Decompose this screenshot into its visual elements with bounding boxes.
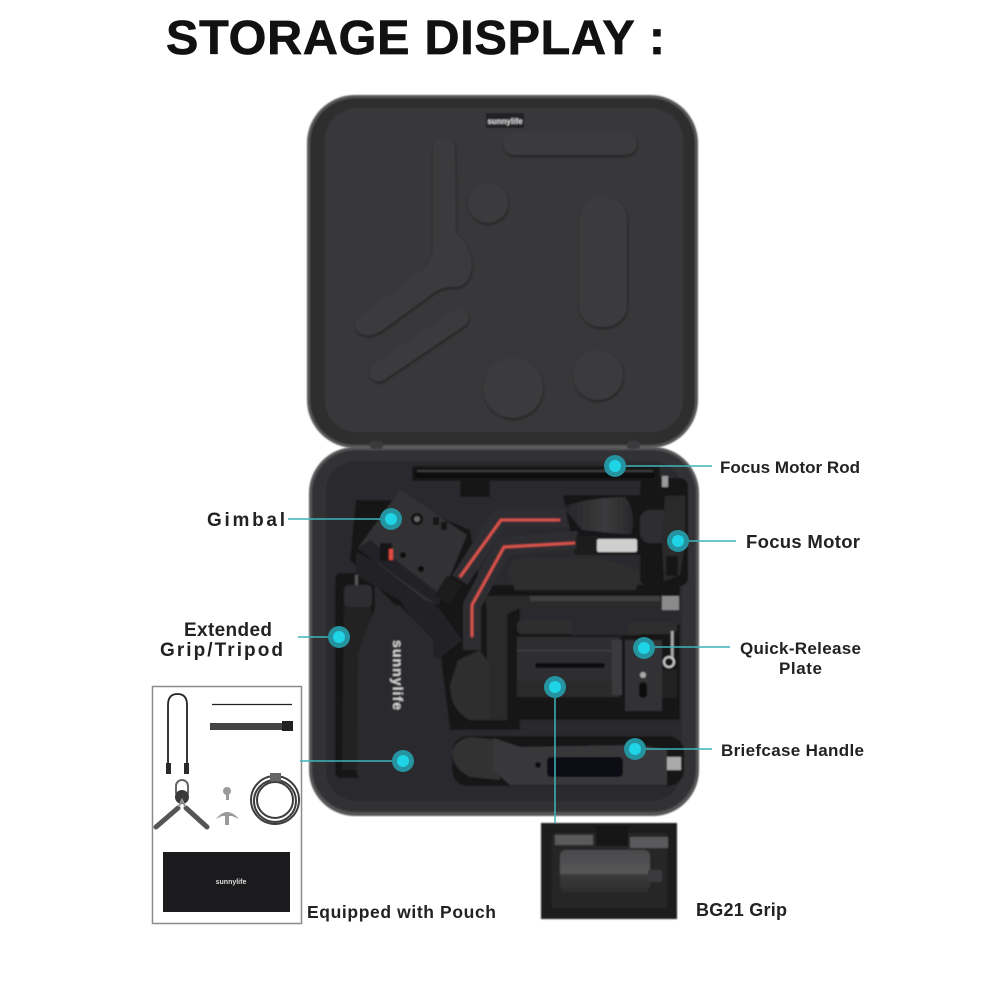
thin cord — [212, 704, 292, 706]
lower gimbal arm with red stripe — [472, 540, 578, 650]
label: Equipped with Pouch: Equipped with Pouch — [307, 902, 496, 922]
lid foam: top bar — [503, 132, 637, 155]
focus ring cable — [251, 773, 299, 824]
label: BG21 Grip: BG21 Grip — [696, 900, 787, 920]
lid foam: Y-shaped arm — [355, 139, 472, 336]
focus motor rod — [415, 469, 655, 478]
label: Focus Motor: Focus Motor — [746, 531, 860, 552]
label: Quick-Release Plate: Quick-Release — [740, 639, 861, 658]
focus motor — [640, 476, 685, 581]
label: Extended Grip/Tripod: Extended — [184, 620, 272, 641]
case lid (upper half) — [307, 95, 698, 448]
case base (lower half) — [309, 441, 699, 816]
dark foam recesses — [335, 466, 688, 786]
mini tripod — [156, 780, 207, 827]
battery plate — [517, 637, 622, 697]
label: Focus Motor Rod: Focus Motor Rod — [720, 458, 860, 477]
velcro strap — [210, 721, 293, 731]
cable — [166, 694, 189, 774]
black pouch: sunnylife — [216, 879, 246, 886]
pouch: sunnylife — [390, 640, 406, 710]
quick-release plate — [625, 631, 677, 711]
L-shaped bracket — [485, 596, 679, 720]
label: Quick-Release Plate — [740, 639, 861, 678]
upper gimbal arm with red stripe — [460, 518, 566, 580]
brand tag — [486, 113, 524, 128]
yaw motor and white clip — [563, 497, 637, 554]
label: Extended Grip/Tripod: Grip/Tripod — [160, 640, 283, 661]
tripod grip — [342, 575, 372, 770]
label: Quick-Release Plate: Plate — [779, 659, 822, 678]
title: STORAGE DISPLAY : — [166, 11, 665, 65]
marker dots — [328, 455, 689, 772]
lid foam: round recess — [468, 183, 508, 223]
gimbal body — [358, 490, 467, 605]
lid foam: large circle — [483, 358, 543, 418]
thumb screws — [216, 787, 239, 825]
zipper hinges — [370, 441, 640, 449]
leader lines — [288, 466, 736, 823]
foam lumps — [507, 558, 677, 634]
lid foam: small circle — [573, 350, 623, 400]
briefcase handle — [452, 737, 681, 785]
lid foam shapes — [355, 132, 637, 418]
lid foam: diagonal pill — [379, 318, 459, 372]
pouch — [357, 600, 437, 797]
BG21 grip photo — [541, 823, 677, 919]
lid foam: vertical pill — [579, 197, 627, 327]
pouch fold — [356, 552, 462, 660]
label: Gimbal: Gimbal — [207, 510, 285, 531]
brand tag: sunnylife — [487, 117, 523, 126]
roll motor — [450, 650, 490, 720]
black pouch — [163, 852, 290, 912]
accessories box — [152, 686, 302, 924]
label: Briefcase Handle: Briefcase Handle — [721, 741, 864, 760]
label: Extended Grip/Tripod — [160, 620, 283, 661]
